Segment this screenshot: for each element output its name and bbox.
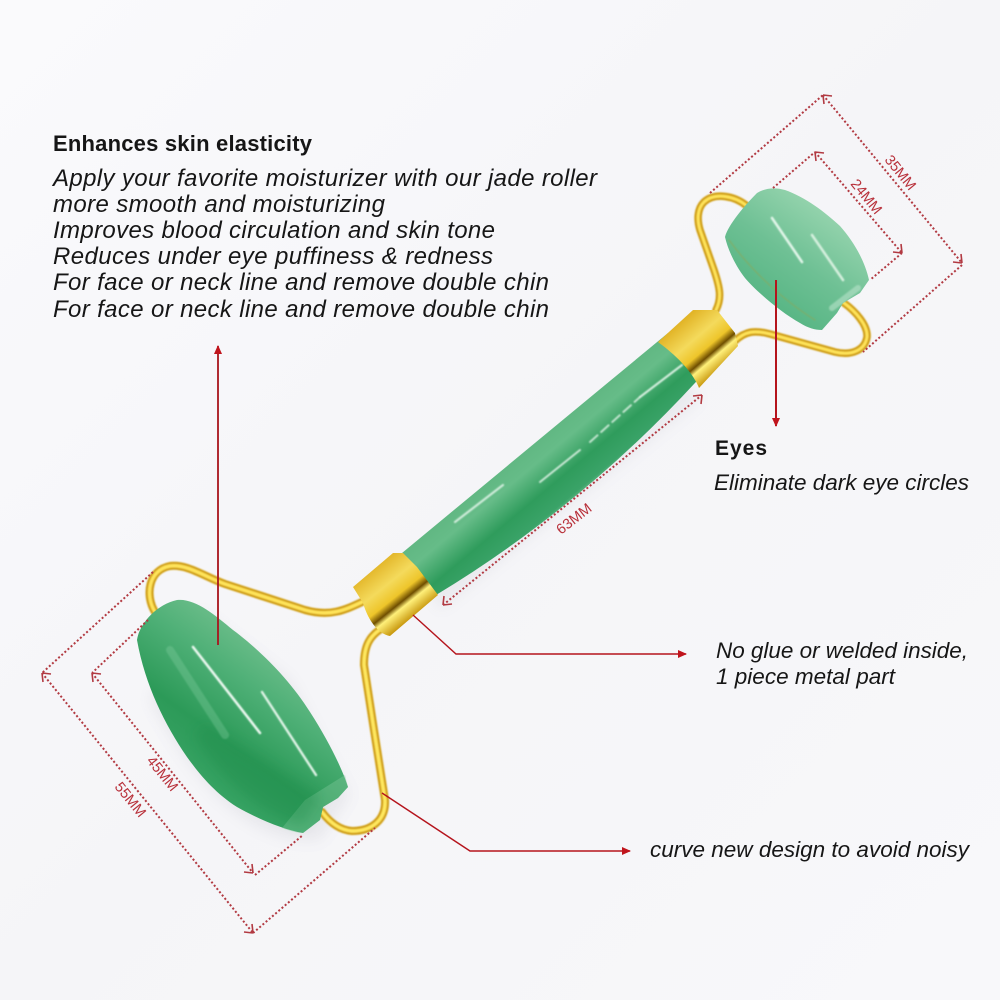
roller highlights <box>170 647 316 775</box>
benefits text block: Improves blood circulation and skin tone <box>53 217 495 244</box>
arrow: to curve note <box>382 793 630 851</box>
text: metal part note: 1 piece metal part <box>716 664 897 689</box>
handle <box>396 333 705 595</box>
benefits text block: For face or neck line and remove double chin <box>53 296 549 323</box>
dimension: 24MM <box>773 152 902 280</box>
gold collar lower <box>353 553 438 636</box>
label 24MM: 24MM <box>847 176 885 218</box>
large jade roller <box>137 600 348 833</box>
benefits text block: Reduces under eye puffiness & redness <box>53 243 493 270</box>
roller end cap shading <box>282 775 348 833</box>
label 55MM: 55MM <box>111 779 149 821</box>
heading: enhances skin elasticity: Enhances skin elasticity <box>53 131 313 156</box>
label 45MM: 45MM <box>143 753 181 795</box>
small jade roller <box>725 188 869 330</box>
text: metal part note <box>716 638 968 689</box>
handle highlights <box>455 365 682 522</box>
shadow under roller <box>150 360 700 841</box>
arrow: to skin elasticity <box>217 346 219 645</box>
gold collar upper <box>658 310 738 388</box>
jade roller product <box>137 188 869 833</box>
small roller highlights <box>729 218 858 320</box>
heading: eyes: Eyes <box>715 437 767 460</box>
benefits text block <box>51 165 598 323</box>
dimension: 45MM <box>92 620 303 875</box>
dimension: 55MM <box>42 572 375 933</box>
arrow: to eyes <box>775 280 777 426</box>
benefits text block: Apply your favorite moisturizer with our jade roller <box>51 165 598 192</box>
roller dark band <box>195 725 320 825</box>
dimension: 63MM <box>443 395 702 605</box>
gold frame wires <box>150 196 867 831</box>
text: metal part note: No glue or welded inside, <box>716 638 968 663</box>
benefits text block: more smooth and moisturizing <box>53 191 386 218</box>
label 63MM: 63MM <box>554 501 595 538</box>
label 35MM: 35MM <box>881 152 919 194</box>
dimension: 35MM <box>710 95 962 352</box>
text: eyes note: Eliminate dark eye circles <box>714 470 969 495</box>
benefits text block: For face or neck line and remove double chin <box>53 269 549 296</box>
text: curve note: curve new design to avoid noisy <box>650 837 971 862</box>
arrow: to metal part note <box>413 615 686 654</box>
